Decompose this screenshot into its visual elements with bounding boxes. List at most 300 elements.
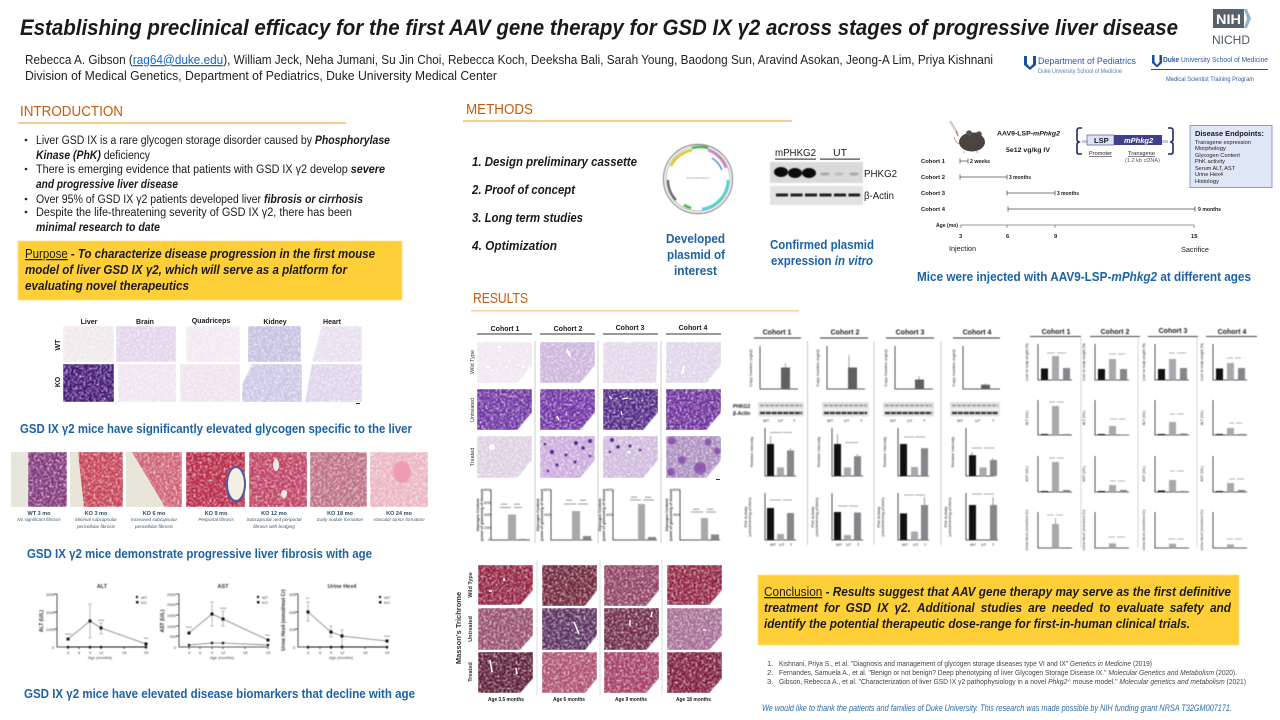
- introduction bullets: Kinase (PhK) deficiency: [36, 150, 150, 162]
- PHKG2 western strips: T: [992, 418, 995, 423]
- dose text: 5e12 vg/kg IV: [1006, 147, 1051, 154]
- diagram: cohort timeline: 2 weeks: [970, 159, 990, 165]
- introduction bullets: minimal research to date: [36, 222, 161, 234]
- line chart: ALT: WT: [141, 595, 148, 600]
- figure: liver PAS histology across cohorts: Cohort 2: [554, 326, 582, 333]
- logo: NIH NICHD: [1212, 9, 1251, 47]
- PhK activity bar charts: WT: [770, 542, 777, 547]
- bar charts: glycogen content: ****: [580, 498, 587, 503]
- logo: Department of Pediatrics: Department of Pediatrics: [1038, 56, 1136, 67]
- PhK activity bar charts: (umol/min/mg protein): [947, 497, 952, 536]
- bar charts: glycogen content: Glycogen Content: [665, 498, 669, 531]
- figure: Masson's trichrome histology: Age 18 months: [676, 697, 711, 703]
- PHKG2 western strips: UT: [907, 418, 913, 423]
- diagram: vector construct: mPhkg2: [1124, 136, 1154, 145]
- PhK activity bar charts: UT: [913, 542, 919, 547]
- AST charts: [1025, 456, 1247, 492]
- conclusion callout: identify the potential therapeutic dose-range for first-in-human clinical trials.: [764, 616, 1190, 631]
- dose text: [997, 130, 1060, 154]
- figure: PAS tissue panels: Kidney: [263, 319, 287, 326]
- bar charts: glycogen content: Glycogen Content: [476, 498, 480, 531]
- line chart: AST: 6: [199, 650, 202, 655]
- logo: NIH NICHD: NIH: [1216, 11, 1241, 27]
- line chart: Urine Hex4: WT: [384, 595, 391, 600]
- references: Molecular genetics and metabolism (2021): [1119, 677, 1249, 686]
- figure: fibrosis progression panels: KO 9 mo: [205, 511, 228, 517]
- bar charts: glycogen content: 800: [484, 487, 491, 492]
- figure: liver PAS histology across cohorts: Cohort 1: [491, 326, 519, 333]
- PHKG2 western strips: [733, 402, 1000, 423]
- line chart: AST: WT: [262, 595, 269, 600]
- figure: liver weight and biomarker charts: Cohort 2: [1101, 329, 1129, 336]
- line chart: Urine Hex4: 200: [289, 610, 296, 615]
- panel: disease endpoints: PhK activity: [1195, 159, 1225, 165]
- figure: liver PAS histology across cohorts: Untreated: [470, 398, 476, 422]
- figure: PAS tissue panels: KO: [55, 376, 62, 387]
- caption: cohorts: Mice were injected with AAV9-LSP-mPhkg2 at different ages: [917, 270, 1251, 284]
- dose text: AAV9-LSP- mPhkg2: [997, 130, 1060, 138]
- PHKG2 western strips: UT: [778, 418, 784, 423]
- bar charts: glycogen content: 800: [606, 487, 613, 492]
- bar charts: glycogen content: Glycogen Content: [536, 498, 540, 531]
- caption: fibrosis: GSD IX γ2 mice demonstrate progressive liver fibrosis with age: [27, 547, 372, 561]
- caption: plasmid: plasmid of: [667, 248, 726, 262]
- urine Hex4 charts: Urine Hex4 (mmol/mol Cr): [1025, 510, 1029, 550]
- heading: results: RESULTS: [473, 290, 528, 307]
- line chart: AST: ****: [220, 606, 227, 611]
- line chart: AST: 2000: [167, 602, 177, 607]
- caption: plasmid: [666, 232, 726, 278]
- diagram: cohort timeline: Cohort 2: [921, 175, 945, 181]
- copy number bar charts: [748, 346, 1000, 389]
- line chart: AST: ****: [186, 625, 193, 630]
- references: 1.: [767, 659, 773, 668]
- line chart: Urine Hex4: 9: [330, 650, 333, 655]
- line chart: Urine Hex4: 3: [307, 650, 310, 655]
- caption: blot: expression in vitro: [771, 254, 873, 268]
- line chart: AST: 9: [211, 650, 214, 655]
- figure: Masson's trichrome histology: Wild Type: [468, 572, 474, 598]
- line chart: Urine Hex4: 6: [319, 650, 322, 655]
- diagram: cohort timeline: 15: [1191, 234, 1198, 240]
- PHKG2 western strips: T: [860, 418, 863, 423]
- line chart: Urine Hex4: [281, 584, 391, 660]
- line chart: Urine Hex4: 12: [340, 650, 345, 655]
- bar charts: glycogen content: (umol of glucose/g of tissue): [669, 488, 673, 541]
- PhK activity bar charts: WT: [836, 542, 843, 547]
- line chart: Urine Hex4: 0: [293, 645, 296, 650]
- PHKG2 western strips: WT: [890, 418, 897, 423]
- figure: Masson's trichrome histology: Treated: [468, 662, 474, 682]
- methods steps: 4. Optimization: [471, 239, 557, 253]
- figure: in vitro western blot: [770, 148, 897, 205]
- line chart: AST: 18: [243, 650, 248, 655]
- figure: fibrosis progression panels: No significant fibrosis: [17, 517, 61, 522]
- figure: Masson's trichrome histology: Masson's Trichrome: [454, 592, 463, 664]
- bar charts: glycogen content: 400: [673, 512, 680, 517]
- panel: disease endpoints: Serum ALT, AST: [1195, 166, 1235, 172]
- line chart: ALT: ****: [65, 632, 72, 637]
- introduction bullets: There is emerging evidence that patients with GSD IX γ2 develop severe: [36, 164, 386, 176]
- introduction bullets: Liver GSD IX is a rare glycogen storage disorder caused by Phosphorylase: [36, 135, 391, 147]
- methods steps: [471, 155, 637, 253]
- figure: liver weight and biomarker charts: [1025, 328, 1257, 550]
- liver to body weight charts: Liver to body weight (%): [1200, 343, 1204, 381]
- copy number bar charts: Copy Number (ng/ul): [748, 349, 753, 387]
- PHKG2 western strips: β-Actin: [733, 411, 750, 417]
- figure: fibrosis progression panels: KO 24 mo: [386, 511, 412, 517]
- line chart: ALT: Age (months): [88, 655, 113, 660]
- figure: fibrosis progression panels: Subcapsular and periportal: [247, 517, 302, 522]
- panel: disease endpoints: Disease Endpoints:: [1195, 129, 1264, 138]
- caption: plasmid: interest: [674, 264, 718, 278]
- figure: transgene expression charts: Cohort 4: [963, 330, 991, 336]
- figure: transgene expression charts: Cohort 1: [763, 330, 791, 336]
- figure: Masson's trichrome histology: Age 3.5 months: [488, 697, 524, 703]
- panel: disease endpoints: Transgene expression: [1195, 140, 1251, 146]
- figure: fibrosis progression panels: KO 12 mo: [261, 511, 287, 517]
- line chart: AST: 3: [188, 650, 191, 655]
- figure: Masson's trichrome histology: Untreated: [468, 616, 474, 642]
- line chart: AST: 1000: [167, 624, 177, 629]
- logo: Duke University School of Medicine MSTP: Medical Scientist Training Program: [1166, 77, 1254, 83]
- ALT charts: ALT (U/L): [1142, 411, 1146, 425]
- references: -/-: [1067, 678, 1071, 683]
- conclusion callout: [758, 575, 1239, 645]
- line chart: AST: AST: [218, 584, 229, 590]
- references: Fernandes, Samuela A., et al. "Benign or not benign? Deep phenotyping of liver Glycogen Storage Disease IX." Molecular Genetics and Metabolism (2020).: [779, 668, 1237, 677]
- references: Gibson, Rebecca A., et al. "Characterization of liver GSD IX γ2 pathophysiology in a novel Phkg2: [779, 677, 1081, 686]
- line chart: ALT: 3: [67, 650, 70, 655]
- references: mouse model.": [1071, 677, 1119, 686]
- line chart: AST: AST (U/L): [160, 609, 166, 632]
- urine Hex4 charts: Urine Hex4 (mmol/mol Cr): [1200, 510, 1204, 550]
- figure: liver weight and biomarker charts: Cohort 3: [1159, 328, 1187, 335]
- conclusion callout: treatment for GSD IX γ2. Additional studies are needed to evaluate safety and: [764, 600, 1232, 615]
- bar charts: glycogen content: (umol of glucose/g of tissue): [480, 488, 484, 541]
- line chart: Urine Hex4: KO: [384, 600, 390, 605]
- line chart: Urine Hex4: ****: [384, 634, 391, 639]
- bar charts: glycogen content: [476, 487, 720, 542]
- figure: fibrosis progression panels: KO 6 mo: [143, 511, 166, 517]
- figure: fibrosis progression panels: Increased subcapsular: [131, 517, 178, 522]
- figure: fibrosis progression panels: Periportal fibrosis: [198, 517, 234, 522]
- copy number bar charts: Copy Number (ng/ul): [815, 349, 820, 387]
- diagram: cohort timeline: Sacrifice: [1181, 247, 1209, 254]
- line chart: AST: Age (months): [210, 655, 235, 660]
- methods steps: 3. Long term studies: [472, 211, 583, 225]
- panel: disease endpoints: [1190, 126, 1272, 188]
- diagram: cohort timeline: 3 months: [1009, 175, 1031, 181]
- PhK activity bar charts: WT: [902, 542, 909, 547]
- line chart: Urine Hex4: **: [306, 596, 310, 601]
- figure: fibrosis progression panels: Minimal subcapsular: [75, 517, 117, 522]
- ALT charts: ALT (U/L): [1082, 411, 1086, 425]
- bar charts: glycogen content: ****: [501, 502, 508, 507]
- references: [767, 659, 1246, 686]
- figure: fibrosis progression panels: pericellular fibrosis: [76, 524, 116, 529]
- figure: Masson's trichrome histology: Age 9 months: [615, 697, 647, 703]
- figure: fibrosis progression panels: fibrosis with bridging: [253, 524, 295, 529]
- PHKG2 western strips: PHKG2: [733, 404, 750, 410]
- PHKG2 western strips: WT: [827, 418, 834, 423]
- line chart: AST: 500: [170, 634, 177, 639]
- PhK activity bar charts: T: [924, 542, 927, 547]
- heading: methods: METHODS: [466, 101, 533, 118]
- methods steps: 1. Design preliminary cassette: [472, 155, 637, 169]
- purpose callout: model of liver GSD IX γ2, which will serve as a platform for: [25, 263, 348, 277]
- figure: in vitro western blot: UT: [833, 148, 847, 159]
- urine Hex4 charts: Urine Hex4 (mmol/mol Cr): [1142, 510, 1146, 550]
- AST charts: AST (U/L): [1025, 466, 1029, 482]
- bar charts: glycogen content: ****: [631, 495, 638, 500]
- line chart: AST: [160, 584, 271, 660]
- figure: Masson's trichrome histology: Age 6 months: [553, 697, 585, 703]
- purpose callout: [18, 241, 402, 300]
- liver to body weight charts: [1025, 343, 1247, 381]
- PhK activity bar charts: PhK Activity: [876, 506, 881, 528]
- diagram: cohort timeline: [921, 158, 1221, 254]
- figure: PAS tissue panels: Heart: [323, 319, 342, 326]
- liver to body weight charts: Liver to body weight (%): [1142, 343, 1146, 381]
- figure: transgene expression charts: [733, 330, 1000, 547]
- figure: liver PAS histology across cohorts: Cohort 3: [616, 325, 644, 332]
- line chart: ALT: ALT: [97, 584, 108, 590]
- PhK activity bar charts: (umol/min/mg protein): [880, 497, 885, 536]
- bar charts: glycogen content: ****: [645, 495, 652, 500]
- line chart: AST: 2500: [167, 592, 177, 597]
- line chart: Urine Hex4: Urine Hex4 (mmol/mol Cr): [281, 589, 287, 651]
- figure: PAS tissue panels: [55, 318, 362, 404]
- figure: fibrosis progression panels: WT 3 mo: [28, 511, 51, 517]
- line chart: ALT: 1000: [46, 627, 56, 632]
- ALT charts: ALT (U/L): [1025, 411, 1029, 425]
- purpose callout: evaluating novel therapeutics: [25, 279, 189, 293]
- bar charts: glycogen content: ****: [514, 502, 521, 507]
- figure: PAS tissue panels: WT: [55, 339, 62, 350]
- panel: disease endpoints: Morphology: [1195, 146, 1226, 152]
- figure: fibrosis progression panels: pericellular fibrosis: [134, 524, 174, 529]
- PHKG2 western strips: T: [793, 418, 796, 423]
- diagram: vector construct: (1.2 kb cDNA): [1125, 158, 1160, 164]
- bar charts: glycogen content: 400: [544, 512, 551, 517]
- references: 3.: [767, 677, 773, 686]
- caption: blot: Confirmed plasmid: [770, 238, 874, 252]
- line chart: ALT: 24: [144, 650, 149, 655]
- figure: liver PAS histology across cohorts: Treated: [470, 448, 476, 466]
- line chart: ALT: 12: [99, 650, 104, 655]
- PHKG2 western strips: WT: [763, 418, 770, 423]
- introduction bullets: Despite the life-threatening severity of GSD IX γ2, there has been: [36, 207, 352, 219]
- line chart: ALT: ****: [98, 618, 105, 623]
- logo: Duke University School of Medicine MSTP: Duke University School of Medicine: [1163, 55, 1268, 64]
- conclusion callout: Conclusion - Results suggest that AAV gene therapy may serve as the first definitive: [764, 584, 1231, 599]
- bar charts: glycogen content: Glycogen Content: [598, 498, 602, 531]
- bar charts: glycogen content: 0: [488, 537, 491, 542]
- diagram: vector construct: LSP: [1094, 136, 1109, 145]
- PhK activity bar charts: PhK Activity: [743, 506, 748, 528]
- line chart: AST: KO: [262, 600, 268, 605]
- diagram: cohort timeline: Cohort 3: [921, 191, 946, 197]
- introduction bullets: and progressive liver disease: [36, 179, 179, 191]
- caption: plasmid: Developed: [666, 232, 725, 246]
- introduction bullets: [25, 135, 391, 234]
- caption: glycogen: GSD IX γ2 mice have significantly elevated glycogen specific to the liver: [20, 422, 412, 436]
- figure: in vitro western blot: PHKG2: [864, 168, 897, 180]
- bar charts: glycogen content: 600: [484, 500, 491, 505]
- PhK activity bar charts: UT: [779, 542, 785, 547]
- relative intensity bar charts: Relative Intensity: [816, 437, 821, 467]
- AST charts: AST (U/L): [1142, 466, 1146, 482]
- panel: disease endpoints: Histology: [1195, 179, 1219, 185]
- PhK activity bar charts: T: [790, 542, 793, 547]
- relative intensity bar charts: [749, 428, 997, 476]
- line chart: ALT: 9: [89, 650, 92, 655]
- line chart: AST: 0: [174, 645, 177, 650]
- figure: PAS tissue panels: Brain: [136, 319, 154, 326]
- caption: biomarkers: GSD IX γ2 mice have elevated disease biomarkers that decline with age: [24, 687, 415, 701]
- copy number bar charts: Copy Number (ng/ul): [883, 349, 888, 387]
- logo: Department of Pediatrics: Duke University School of Medicine: [1038, 69, 1123, 75]
- diagram: vector construct: Transgene: [1128, 151, 1155, 157]
- AST charts: AST (U/L): [1200, 466, 1204, 482]
- PHKG2 western strips: WT: [957, 418, 964, 423]
- relative intensity bar charts: Relative Intensity: [749, 437, 754, 467]
- figure: fibrosis progression panels: Early nodule formation: [317, 517, 363, 522]
- relative intensity bar charts: Relative Intensity: [950, 437, 955, 467]
- line chart: ALT: 3000: [46, 592, 56, 597]
- line chart: ALT: ***: [144, 636, 149, 641]
- icon: injected mouse: [950, 121, 985, 153]
- affiliation: Division of Medical Genetics, Department of Pediatrics, Duke University Medical Center: [25, 69, 497, 83]
- PhK activity bar charts: UT: [846, 542, 852, 547]
- bar charts: glycogen content: ****: [566, 498, 573, 503]
- figure: liver PAS histology across cohorts: [470, 325, 721, 543]
- figure: liver PAS histology across cohorts: Wild Type: [470, 350, 476, 374]
- line chart: ALT: 0: [52, 645, 55, 650]
- diagram: cohort timeline: 9 months: [1198, 207, 1221, 213]
- line chart: Urine Hex4: 24: [385, 650, 390, 655]
- figure: fibrosis progression panels: KO 3 mo: [85, 511, 108, 517]
- figure: Masson's trichrome histology: [454, 560, 722, 703]
- figure: liver weight and biomarker charts: Cohort 4: [1218, 329, 1246, 336]
- figure: PAS tissue panels: Liver: [81, 319, 98, 326]
- figure: transgene expression charts: Cohort 2: [831, 330, 859, 336]
- relative intensity bar charts: Relative Intensity: [882, 437, 887, 467]
- copy number bar charts: Copy Number (ng/ul): [951, 349, 956, 387]
- liver to body weight charts: Liver to body weight (%): [1082, 343, 1086, 381]
- references: Kishnani, Priya S., et al. "Diagnosis and management of glycogen storage diseases type VI and IX" Genetics in Medicine (2019): [779, 659, 1152, 668]
- line chart: ALT: 2000: [46, 610, 56, 615]
- figure: in vitro western blot: mPHKG2: [775, 148, 816, 159]
- PhK activity bar charts: PhK Activity: [810, 506, 815, 528]
- liver to body weight charts: Liver to body weight (%): [1025, 343, 1029, 381]
- line chart: Urine Hex4: Urine Hex4: [328, 584, 357, 590]
- bar charts: glycogen content: 400: [606, 512, 613, 517]
- line chart: ALT: [39, 584, 149, 660]
- caption: blot: [770, 238, 874, 268]
- line chart: ALT: ALT (U/L): [39, 610, 45, 632]
- PhK activity bar charts: T: [857, 542, 860, 547]
- bar charts: glycogen content: ****: [693, 507, 700, 512]
- diagram: cohort timeline: Cohort 4: [921, 207, 946, 213]
- line chart: Urine Hex4: Age (months): [329, 655, 354, 660]
- purpose callout: Purpose - To characterize disease progression in the first mouse: [25, 247, 375, 261]
- diagram: cohort timeline: 9: [1054, 234, 1058, 240]
- PhK activity bar charts: UT: [981, 542, 987, 547]
- line chart: AST: 12: [221, 650, 226, 655]
- icon: plasmid map: [664, 144, 732, 214]
- bar charts: glycogen content: (umol of glucose/g of tissue): [540, 488, 544, 541]
- line chart: AST: 24: [266, 650, 271, 655]
- bar charts: glycogen content: 200: [484, 525, 491, 530]
- PhK activity bar charts: PhK Activity: [943, 506, 948, 528]
- introduction bullets: Over 95% of GSD IX γ2 patients developed liver fibrosis or cirrhosis: [36, 194, 363, 206]
- bar charts: glycogen content: (umol of glucose/g of tissue): [602, 488, 606, 541]
- figure: liver PAS histology across cohorts: Cohort 4: [679, 325, 707, 332]
- PhK activity bar charts: [743, 493, 998, 547]
- diagram: cohort timeline: 3: [959, 234, 963, 240]
- line chart: AST: ***: [265, 633, 270, 638]
- line chart: AST: 1500: [167, 613, 177, 618]
- panel: disease endpoints: Glycogen Content: [1195, 153, 1240, 159]
- PHKG2 western strips: UT: [975, 418, 981, 423]
- urine Hex4 charts: [1025, 510, 1247, 550]
- PhK activity bar charts: (umol/min/mg protein): [814, 497, 819, 536]
- heading: introduction: INTRODUCTION: [20, 103, 123, 120]
- PHKG2 western strips: T: [923, 418, 926, 423]
- diagram: cohort timeline: 3 months: [1057, 191, 1079, 197]
- line chart: Urine Hex4: 18: [363, 650, 368, 655]
- bar charts: glycogen content: 800: [544, 487, 551, 492]
- methods steps: 2. Proof of concept: [471, 183, 576, 197]
- references: 2.: [767, 668, 773, 677]
- title: Establishing preclinical efficacy for the first AAV gene therapy for GSD IX γ2 across stages of progressive liver disease: [20, 15, 1178, 40]
- panel: disease endpoints: Urine Hex4: [1195, 172, 1224, 178]
- AST charts: AST (U/L): [1082, 466, 1086, 482]
- ALT charts: ALT (U/L): [1200, 411, 1204, 425]
- PHKG2 western strips: UT: [844, 418, 850, 423]
- figure: liver weight and biomarker charts: Cohort 1: [1042, 329, 1070, 336]
- PhK activity bar charts: WT: [970, 542, 977, 547]
- PhK activity bar charts: (umol/min/mg protein): [747, 497, 752, 536]
- logo: Duke University School of Medicine MSTP: [1151, 55, 1268, 83]
- diagram: cohort timeline: 6: [1006, 234, 1010, 240]
- diagram: vector construct: Promoter: [1089, 151, 1112, 157]
- logo: NIH NICHD: NICHD: [1212, 35, 1250, 47]
- figure: fibrosis progression panels: Vascular tumor formation: [373, 517, 425, 522]
- figure: PAS tissue panels: Quadriceps: [192, 318, 230, 325]
- diagram: cohort timeline: Age (mo): [936, 223, 958, 229]
- figure: fibrosis progression panels: KO 18 mo: [327, 511, 353, 517]
- urine Hex4 charts: Urine Hex4 (mmol/mol Cr): [1082, 510, 1086, 550]
- figure: fibrosis progression panels: [11, 452, 428, 529]
- line chart: ALT: KO: [141, 600, 147, 605]
- ALT charts: [1025, 400, 1247, 435]
- authors: Rebecca A. Gibson (rag64@duke.edu), William Jeck, Neha Jumani, Su Jin Choi, Rebecca Koch, Deeksha Bali, Sarah Young, Baodong Sun, Aravind Asokan, Jeong-A Lim, Priya Kishnani: [25, 53, 993, 67]
- PhK activity bar charts: T: [992, 542, 995, 547]
- diagram: vector construct: [1077, 128, 1173, 164]
- bar charts: glycogen content: 400: [484, 512, 491, 517]
- figure: transgene expression charts: Cohort 3: [896, 330, 924, 336]
- line chart: Urine Hex4: 300: [289, 592, 296, 597]
- logo: Department of Pediatrics: [1024, 56, 1136, 75]
- line chart: ALT: 18: [122, 650, 127, 655]
- bar charts: glycogen content: 800: [673, 487, 680, 492]
- bar charts: glycogen content: ****: [707, 507, 714, 512]
- line chart: ALT: 6: [78, 650, 81, 655]
- diagram: cohort timeline: Cohort 1: [921, 159, 946, 165]
